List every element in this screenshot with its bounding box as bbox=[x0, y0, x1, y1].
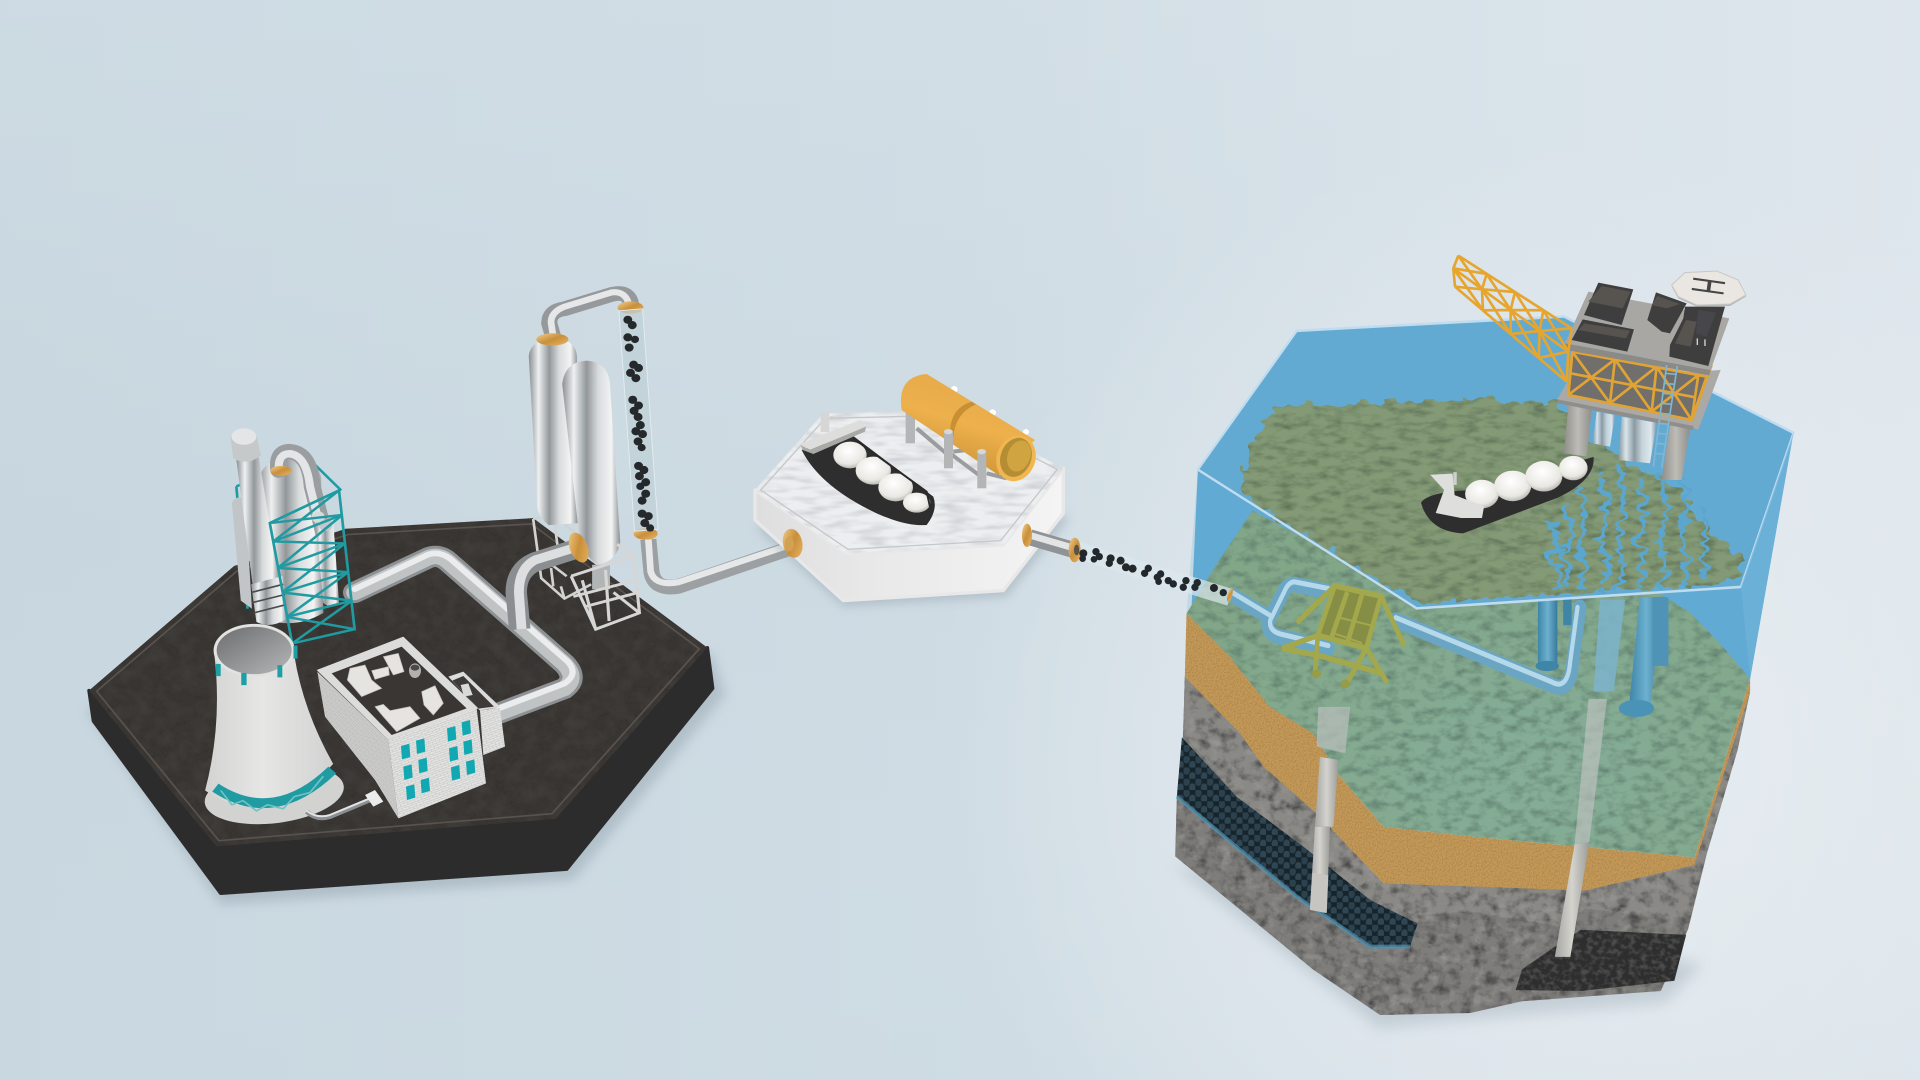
flanges bbox=[536, 301, 658, 540]
annex bbox=[448, 672, 505, 755]
rear teal frame bbox=[236, 458, 341, 609]
orange truss frame bbox=[1568, 352, 1712, 420]
helipad bbox=[1672, 271, 1746, 307]
feed pipe bbox=[516, 547, 578, 629]
floating LNG tanker bbox=[1421, 456, 1594, 533]
rear vessel bbox=[232, 497, 252, 609]
glass tube with pellets into seabed bbox=[1069, 538, 1234, 603]
roof units bbox=[347, 653, 443, 732]
base shadow bbox=[87, 597, 725, 905]
offshore platform bbox=[1453, 256, 1746, 480]
teal truss front bbox=[270, 490, 355, 644]
drilling wells bbox=[1310, 699, 1607, 957]
tall stack bbox=[231, 428, 287, 625]
deck modules bbox=[1572, 283, 1725, 366]
front cage bbox=[571, 544, 639, 629]
right columns with wire cages bbox=[516, 292, 792, 629]
olive subsea manifold bbox=[1282, 586, 1404, 688]
orange storage cylinder bbox=[901, 374, 1042, 487]
glass tube with pellets bbox=[619, 309, 658, 532]
rear cage bbox=[533, 514, 591, 599]
teal band bbox=[215, 770, 332, 803]
front water tint bbox=[1187, 470, 1750, 679]
seabed seen through surface bbox=[1240, 399, 1743, 603]
water surface bbox=[1198, 317, 1793, 608]
crane boom bbox=[1453, 256, 1572, 382]
export pipe to terminal bbox=[648, 539, 792, 587]
panel: white LNG terminal hexagon bbox=[755, 374, 1073, 607]
blue subsea pipeline bbox=[1232, 582, 1580, 687]
overhead pipe bbox=[549, 292, 631, 337]
roof bbox=[317, 637, 478, 740]
teal tabs bbox=[216, 646, 297, 685]
back water volume bbox=[1185, 317, 1793, 750]
upper concrete deck bbox=[1565, 292, 1729, 370]
tank front legs bbox=[944, 429, 986, 488]
concrete and chrome legs bbox=[1564, 405, 1690, 480]
curved pipe bbox=[278, 452, 323, 531]
gas pellet reservoir bbox=[1177, 737, 1418, 947]
coal seam bbox=[1516, 930, 1686, 991]
submerged platform legs bbox=[1535, 597, 1668, 717]
connecting pipe bbox=[307, 790, 383, 818]
outlet pipe bbox=[1030, 535, 1073, 550]
LNG tanker on terminal bbox=[800, 413, 935, 525]
helipad letter: H bbox=[1681, 274, 1735, 298]
walls bbox=[317, 672, 398, 818]
secondary column bbox=[315, 515, 339, 606]
terminal shadow bbox=[755, 517, 1070, 607]
storage tank cradle bbox=[906, 405, 1007, 478]
rock silhouette bbox=[1175, 677, 1750, 1015]
block shadow bbox=[1173, 865, 1703, 1028]
ladder bbox=[1653, 365, 1677, 468]
refraction streaks bbox=[1549, 470, 1707, 587]
right well bbox=[1555, 699, 1607, 957]
sand layer bbox=[1185, 613, 1750, 891]
plant base and left process units bbox=[87, 428, 725, 905]
cooling tower bbox=[201, 624, 348, 832]
panel: onshore processing plant on dark hexagonal base bbox=[87, 292, 792, 905]
left flange bbox=[780, 527, 805, 560]
front column bbox=[562, 361, 620, 565]
left well bbox=[1310, 707, 1350, 913]
rear column bbox=[529, 337, 578, 525]
right water side bbox=[1741, 433, 1793, 679]
control building bbox=[307, 637, 505, 818]
dark hexagonal base bbox=[89, 518, 713, 893]
upper rock shading bbox=[1183, 677, 1750, 926]
windows bbox=[401, 720, 475, 800]
gold flange bbox=[270, 466, 292, 476]
left teal-framed process tower bbox=[231, 428, 355, 644]
frame interior bbox=[1568, 352, 1707, 420]
panel: offshore block with seabed strata, wells, platform bbox=[1173, 317, 1793, 1028]
lower concrete deck bbox=[1557, 370, 1721, 429]
main steel pipe loop bbox=[355, 553, 573, 713]
white hexagon base bbox=[755, 411, 1063, 601]
seabed top bbox=[1187, 510, 1750, 857]
large silver vessel bbox=[259, 458, 323, 623]
